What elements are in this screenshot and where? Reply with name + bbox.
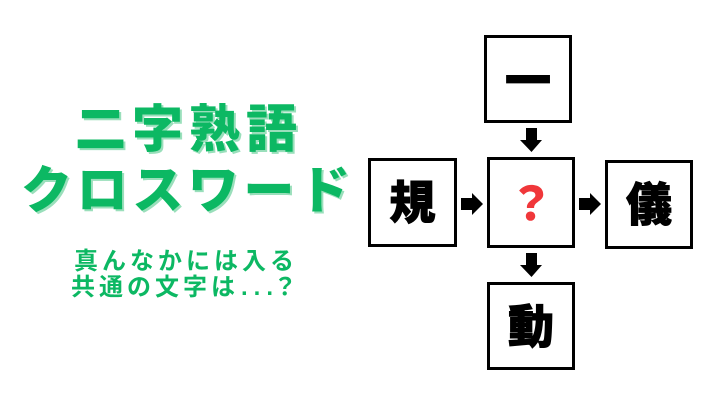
box: left kanji: 規 [390, 177, 436, 229]
title line 1: 二字熟語 [75, 101, 303, 158]
arrow: left to center [461, 193, 483, 215]
box: left kanji [368, 158, 457, 247]
box: center question mark [487, 157, 575, 248]
box: bottom kanji [487, 282, 575, 370]
box: right kanji [605, 160, 693, 249]
arrow: top to center [520, 128, 542, 152]
box: bottom kanji: 動 [508, 300, 554, 352]
arrow: center to bottom [520, 253, 542, 277]
box: center question mark: ？ [508, 178, 554, 230]
box: top kanji [484, 35, 572, 123]
box: top kanji: 一 [505, 55, 551, 107]
title line 2: クロスワード [21, 162, 355, 219]
subtitle line 1: 真んなかには入る [74, 248, 298, 275]
subtitle line 2: 共通の文字は...？ [71, 274, 301, 301]
arrow: center to right [579, 193, 601, 215]
box: right kanji: 儀 [626, 179, 672, 231]
